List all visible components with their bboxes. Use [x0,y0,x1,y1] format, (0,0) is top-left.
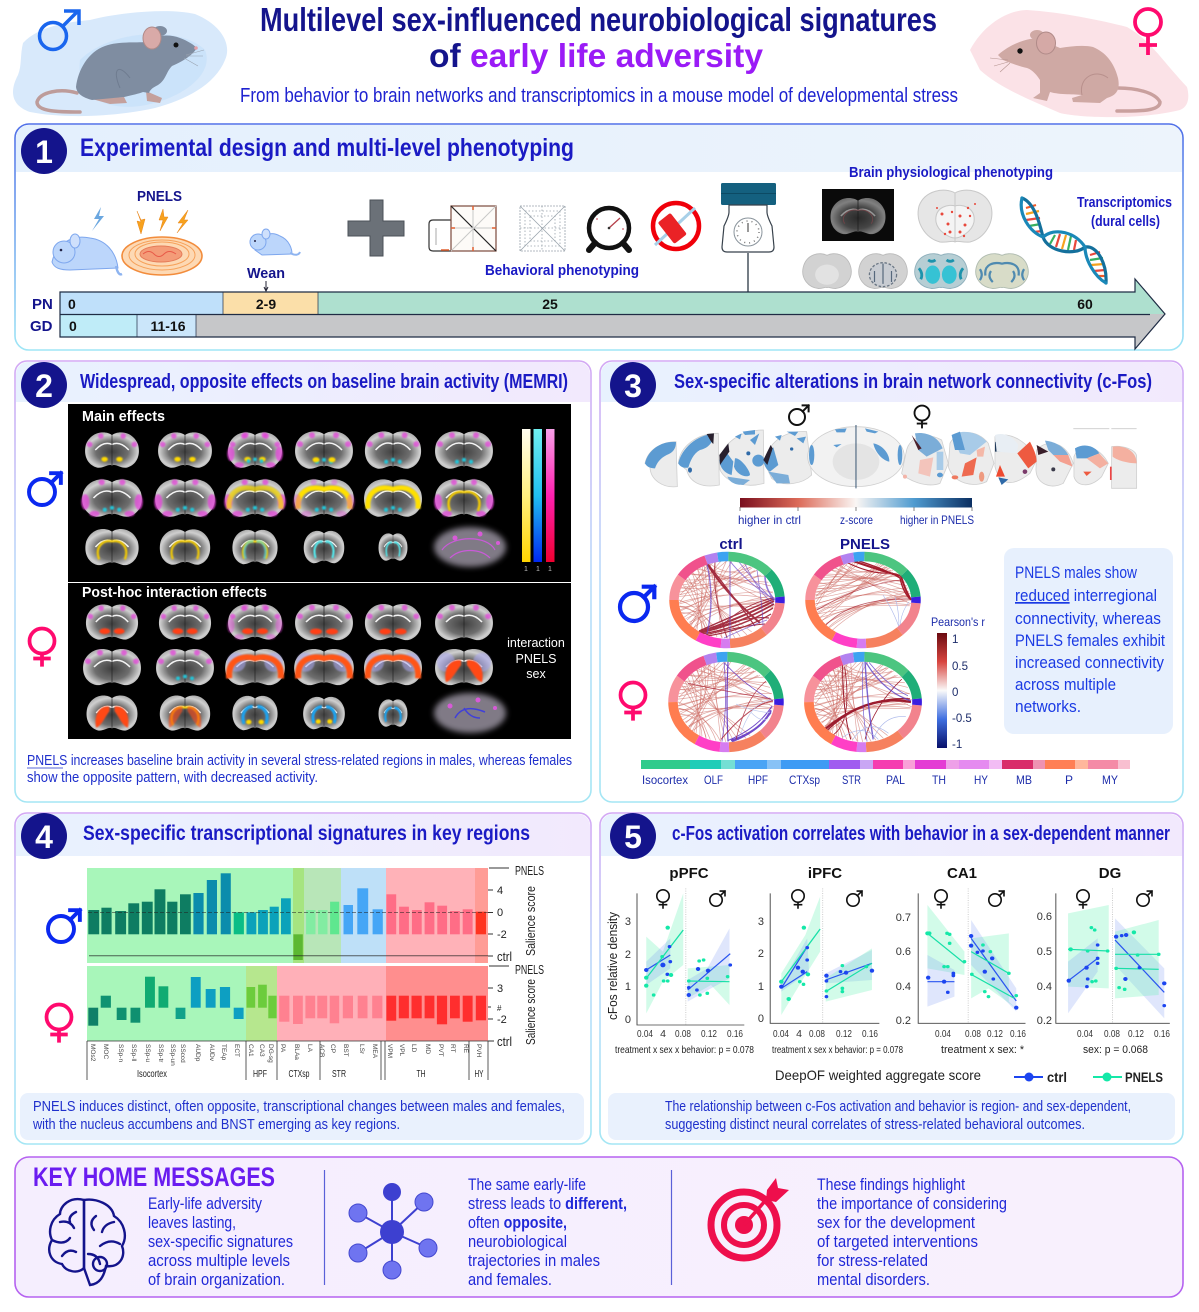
image: section with red c-Fos spots [918,190,992,242]
circos: male PNELS [810,555,916,644]
scatter plot: iPFC: 0.12 [836,1028,852,1040]
axis: region labels: AUDp [194,1044,201,1062]
axis: region labels: HY [474,1069,484,1080]
scatter plot: pPFC: 2 [625,949,631,961]
icon: male symbol black [789,405,809,425]
axis: region labels: LSr [358,1044,365,1055]
colour bars: 1 [536,566,540,573]
circos: male ctrl [674,554,781,644]
icon: pup with lightning [52,207,122,274]
legend: brain regions: CTXsp [789,773,820,787]
timeline arrow: 2-9 [256,296,276,312]
axis: region labels: SSp-un [169,1044,176,1066]
colour bars: 1 [548,566,552,573]
labels: ctrl and PNELS: PNELS [840,536,890,553]
axis: region labels: ACB [318,1044,325,1057]
axis: region labels: MEA [371,1044,378,1059]
scatter plot: pPFC: 3 [625,916,631,928]
timeline arrow: 25 [542,296,558,312]
number badge 2: 2 [35,368,53,404]
icon: elevated plus maze [429,206,496,251]
text block: key message 2: often opposite, [468,1213,567,1232]
timeline arrow: 60 [1077,296,1093,312]
text block: key message 1: Early-life adversity [148,1194,262,1213]
bar chart: female salience: Salience score [523,979,538,1045]
axis: region labels: BST [342,1044,349,1057]
scatter plot: pPFC: 1 [625,981,631,993]
axis: region labels: STR [332,1069,346,1080]
panel: key home messages [15,1157,1183,1297]
legend: brain regions: OLF [704,773,723,787]
colour bar: z-score: z-score [840,513,873,527]
axis: region labels: AUDv [208,1044,215,1062]
icon: network [349,1183,437,1279]
label: PNELS: PNELS [137,188,182,205]
timeline arrow: GD [30,318,53,335]
text block: key message 2 [468,1175,627,1289]
scatter plot: iPFC: 0.04 [773,1028,789,1040]
axis: region labels: PVH [475,1044,482,1058]
bar chart: male salience: 0 [497,907,503,919]
scatter plot: CA1: 0.7 [896,912,911,924]
axis: region labels: LA [306,1044,313,1053]
scatter plot: CA1: 0.12 [987,1028,1003,1040]
scatter plot: DG: 0.16 [1154,1028,1170,1040]
icon: male symbol [29,473,61,505]
bar chart: female salience: -2 [497,1014,507,1026]
image panel: post-hoc interaction effects: Post-hoc interaction effects [82,584,267,601]
scatter plot: pPFC: treatment x sex x behavior: p = 0.078 [615,1044,754,1056]
icon: plus [348,200,404,256]
callout: connectivity summary: across multiple [1015,675,1116,694]
illustration: male mouse [13,11,227,116]
scatter plot: pPFC: 0.08 [675,1028,691,1040]
text block: key message 3 [817,1175,1007,1289]
timeline arrow: 0 [68,296,76,312]
icon: female symbol [30,628,54,667]
colour bar: Pearson's r: 1 [952,634,958,646]
number badge 5: 5 [624,819,642,855]
heading: key home messages: KEY HOME MESSAGES [33,1162,275,1192]
heading 2: Widespread, opposite effects on baseline brain activity (MEMRI) [80,371,568,393]
bar chart: female salience: 3 [497,983,503,995]
atlas slices: z-score maps [645,425,1137,488]
callout: connectivity summary [1004,548,1173,734]
legend: brain regions: MY [1102,773,1118,787]
colour bars [522,429,554,573]
icon: DNA helix [1021,198,1106,283]
text block: key message 1: leaves lasting, [148,1213,236,1232]
timeline arrow [30,279,1165,349]
scatter plot: DG: sex: p = 0.068 [1083,1044,1148,1056]
callout: connectivity summary: reduced interregional [1015,586,1157,605]
scatter plot: iPFC: iPFC [808,865,842,882]
axis: region labels: SSp-tr [157,1044,164,1063]
circos: female PNELS [809,655,917,747]
scatter plot: iPFC [758,865,903,1056]
label: interaction PNELS sex: PNELS [516,652,556,666]
axis: region labels: VPL [398,1044,405,1057]
scatter plot: CA1: CA1 [947,865,977,882]
label: transcriptomics: (dural cells) [1091,213,1160,230]
labels: ctrl and PNELS: ctrl [719,536,743,553]
title: of early life adversity [429,37,764,74]
axis: region labels: RE [462,1044,469,1054]
bar chart: female salience: # [497,1004,502,1013]
text block: panel 4 summary [20,1093,584,1140]
axis: region labels: PA [279,1044,286,1053]
bar chart: male salience: -2 [497,929,507,941]
illustration: female mouse [970,10,1188,117]
colour bar: Pearson's r: 0 [952,687,958,699]
callout: connectivity summary: increased connectivity [1015,653,1164,672]
label: interaction PNELS sex [507,636,565,681]
legend: brain regions: P [1065,773,1073,787]
scatter plot: CA1: 0.2 [896,1015,911,1027]
scatter plot: CA1: 0.08 [965,1028,981,1040]
icon: clock [589,208,629,250]
header [13,1,1188,117]
scatter plot: DG: 0.5 [1037,946,1052,958]
legend: brain regions [641,760,1130,787]
y axis label: cFos relative density [606,911,620,1020]
text block: panel 5 summary: suggesting distinct neural correlates of stress-related behavioral outcomes. [665,1117,1085,1133]
label: interaction PNELS sex: sex [526,667,546,681]
scatter plot: iPFC: 0.08 [809,1028,825,1040]
scatter plot: DG: 0.08 [1104,1028,1120,1040]
text block: key message 2: and females. [468,1270,552,1289]
scatter plot: CA1: 0.4 [896,981,911,993]
callout: connectivity summary: PNELS females exhibit [1015,631,1165,650]
icon: female symbol [46,1004,72,1043]
axis: region labels: DG-sg [267,1044,274,1063]
scatter plot: iPFC: 0.16 [862,1028,878,1040]
image panel: post-hoc interaction effects [68,583,571,739]
axis: region labels: ECT [233,1044,240,1057]
icon: male symbol [620,587,654,621]
number badge 2 [21,362,67,408]
icon: open field grid [520,206,565,251]
text block: key message 2: neurobiological [468,1232,567,1251]
colour bar: Pearson's r: -0.5 [952,713,972,725]
bar chart: male salience: 4 [497,885,503,897]
legend: ctrl and PNELS: PNELS [1125,1070,1163,1085]
label: brain physiological phenotyping: Brain physiological phenotyping [849,164,1053,181]
text block: key message 3: These findings highlight [817,1175,965,1194]
title: Multilevel sex-influenced neurobiological signatures [260,1,937,38]
bar chart: female salience: ctrl [497,1034,512,1049]
timeline arrow: PN [32,296,53,313]
axis: region labels: CA3 [258,1044,265,1057]
colour bar: Pearson's r: Pearson's r [931,615,985,629]
scatter plot: CA1 [896,865,1026,1056]
legend: brain regions: Isocortex [642,773,688,787]
scatter plot: iPFC: 0 [758,1013,764,1025]
timeline arrow: 11-16 [150,318,186,334]
colour bars: 1 [524,566,528,573]
scatter plot: iPFC: 2 [758,948,764,960]
axis: region labels: CP [329,1044,336,1053]
legend: brain regions: PAL [886,773,905,787]
scatter plot: pPFC [615,865,754,1056]
panel 1: experimental design [15,124,1183,350]
colour bar: z-score [738,498,974,527]
axis: region labels: TH [416,1069,426,1080]
number badge 4 [21,813,67,859]
scatter plot: CA1: 0.16 [1010,1028,1026,1040]
scatter plot: DG: 0.04 [1077,1028,1093,1040]
text block: key message 1: sex-specific signatures [148,1232,293,1251]
text block: key message 2: trajectories in males [468,1251,600,1270]
axis: region labels: SSp-u [144,1044,151,1062]
heading 4: Sex-specific transcriptional signatures in key regions [83,822,530,845]
legend: brain regions: HY [974,773,988,787]
axis: region labels: RT [449,1044,456,1053]
text block: key message 1 [148,1194,293,1289]
label: Wean with arrow: Wean [247,265,285,282]
icon: no-entry syringe [653,203,699,249]
callout: connectivity summary: connectivity, whereas [1015,609,1161,628]
text block: panel 5 summary [608,1093,1175,1140]
text block: key message 2: stress leads to different, [468,1194,627,1213]
axis: region labels: HPF [253,1069,267,1080]
panel 5: c-Fos and behavior [600,813,1183,1144]
scatter plot: pPFC: 4 [660,1028,666,1040]
title [260,1,937,74]
images: four small stained sections [803,254,1028,288]
scatter plot: CA1: treatment x sex: * [941,1044,1025,1056]
scatter plot: DG: DG [1099,865,1121,882]
bar chart: male salience: PNELS [515,863,544,878]
scatter plot: iPFC: 4 [796,1028,802,1040]
panel 3: c-Fos connectivity [600,361,1183,802]
scatter plot: iPFC: 1 [758,981,764,993]
icon: male symbol [48,910,80,942]
icon: weaned mouse [250,229,300,255]
text block: key message 3: the importance of considering [817,1194,1007,1213]
axis: region labels: VPM [386,1044,393,1058]
scatter plot: DG: 0.2 [1037,1015,1052,1027]
axis: region labels: LD [410,1044,417,1053]
axis: region labels: SSp-n [117,1044,124,1062]
axis: region labels: MOs2 [89,1044,96,1062]
labels: ctrl and PNELS [719,536,890,553]
axis: region labels: CA1 [247,1044,254,1057]
heading 1: Experimental design and multi-level phenotyping [80,134,574,162]
number badge 1 [21,128,67,174]
legend: ctrl and PNELS [1014,1070,1163,1085]
icon: nest [122,209,202,275]
scatter plot: DG [1037,865,1170,1056]
axis: region labels: Isocortex [137,1069,167,1080]
legend: brain regions: STR [842,773,861,787]
circos: female ctrl [673,655,779,747]
number badge 3: 3 [624,368,642,404]
axis: region labels: BLAa [293,1044,300,1060]
bar chart: male salience [87,863,544,964]
colour bar: z-score: higher in ctrl [738,513,801,527]
text block: panel 2 summary: PNELS increases baseline brain activity in several stress-related regions in males, whereas females [27,753,572,769]
icon: female symbol black [914,406,930,428]
bar chart: female salience: PNELS [515,962,544,977]
label: interaction PNELS sex: interaction [507,636,565,650]
bar chart: male salience: Salience score [523,886,538,956]
text block: key message 3: for stress-related [817,1251,928,1270]
image panel: main effects [68,404,571,582]
legend: brain regions: TH [932,773,946,787]
axis: region labels: MD [424,1044,431,1054]
subtitle: From behavior to brain networks and transcriptomics in a mouse model of developmental stress [240,85,958,107]
axis: region labels: SSccd [179,1044,186,1063]
colour bar: Pearson's r [931,615,985,751]
scatter plot: iPFC: treatment x sex x behavior: p = 0.078 [772,1044,903,1056]
label: behavioral phenotyping: Behavioral phenotyping [485,262,639,279]
text block: key message 1: of brain organization. [148,1270,285,1289]
icon: female symbol [620,682,646,721]
number badge 4: 4 [35,819,53,855]
axis: region labels: MOC [102,1044,109,1059]
text block: key message 3: sex for the development [817,1213,975,1232]
x axis label: DeepOF weighted aggregate score [775,1067,981,1083]
text block: key message 2: The same early-life [468,1175,586,1194]
scatter plot: pPFC: 0.16 [727,1028,743,1040]
scatter plot: CA1: 0.04 [935,1028,951,1040]
text block: key message 3: mental disorders. [817,1270,930,1289]
scatter plot: DG: 0.4 [1037,981,1052,993]
axis: region labels: SSp-ll [130,1044,137,1062]
scatter plot: DG: 0.6 [1037,911,1052,923]
icon: weighing scale [721,183,776,292]
icon: female symbol pink [1135,9,1161,55]
legend: brain regions: MB [1016,773,1032,787]
text block: key message 1: across multiple levels [148,1251,290,1270]
colour bar: z-score: higher in PNELS [900,513,974,527]
icon: male symbol blue [40,11,79,50]
icon: brain [49,1199,125,1285]
text block: panel 2 summary [27,753,572,786]
callout: connectivity summary: networks. [1015,697,1081,716]
icon: target [711,1178,789,1258]
scatter plot: DG: 0.12 [1128,1028,1144,1040]
text block: key message 3: of targeted interventions [817,1232,978,1251]
axis: region labels: CTXsp [288,1069,310,1080]
image: MRI section [822,189,894,241]
bar chart: female salience [87,962,544,1049]
axis: region labels: PVT [437,1044,444,1057]
colour bar: Pearson's r: 0.5 [952,661,968,673]
text block: panel 4 summary: PNELS induces distinct, often opposite, transcriptional changes between males and females, [33,1099,565,1115]
timeline arrow: 0 [69,318,77,334]
scatter plot: CA1: 0.6 [896,946,911,958]
scatter plot: pPFC: pPFC [669,865,709,882]
panel 2: MEMRI [15,361,591,802]
panel 4: transcriptional signatures [15,813,591,1144]
scatter plot: iPFC: 3 [758,916,764,928]
colour bar: Pearson's r: -1 [952,739,962,751]
number badge 3 [610,362,656,408]
text block: panel 4 summary: with the nucleus accumbens and BNST emerging as key regions. [32,1117,400,1133]
scatter plot: pPFC: 0.04 [637,1028,653,1040]
legend: brain regions: HPF [748,773,768,787]
image panel: main effects: Main effects [82,408,165,425]
scatter plot: pPFC: 0 [625,1014,631,1026]
label: Wean with arrow [247,265,285,291]
scatter plot: pPFC: 0.12 [701,1028,717,1040]
number badge 5 [610,813,656,859]
axis: region labels: TEAp [220,1044,227,1061]
label: transcriptomics: Transcriptomics [1077,194,1172,211]
callout: connectivity summary: PNELS males show [1015,563,1138,582]
bar chart: male salience: ctrl [497,949,512,964]
legend: ctrl and PNELS: ctrl [1047,1070,1067,1085]
text block: panel 2 summary: show the opposite pattern, with decreased activity. [27,770,318,786]
number badge 1: 1 [35,134,53,170]
axis: region labels [87,1041,488,1080]
label: transcriptomics [1077,194,1172,230]
